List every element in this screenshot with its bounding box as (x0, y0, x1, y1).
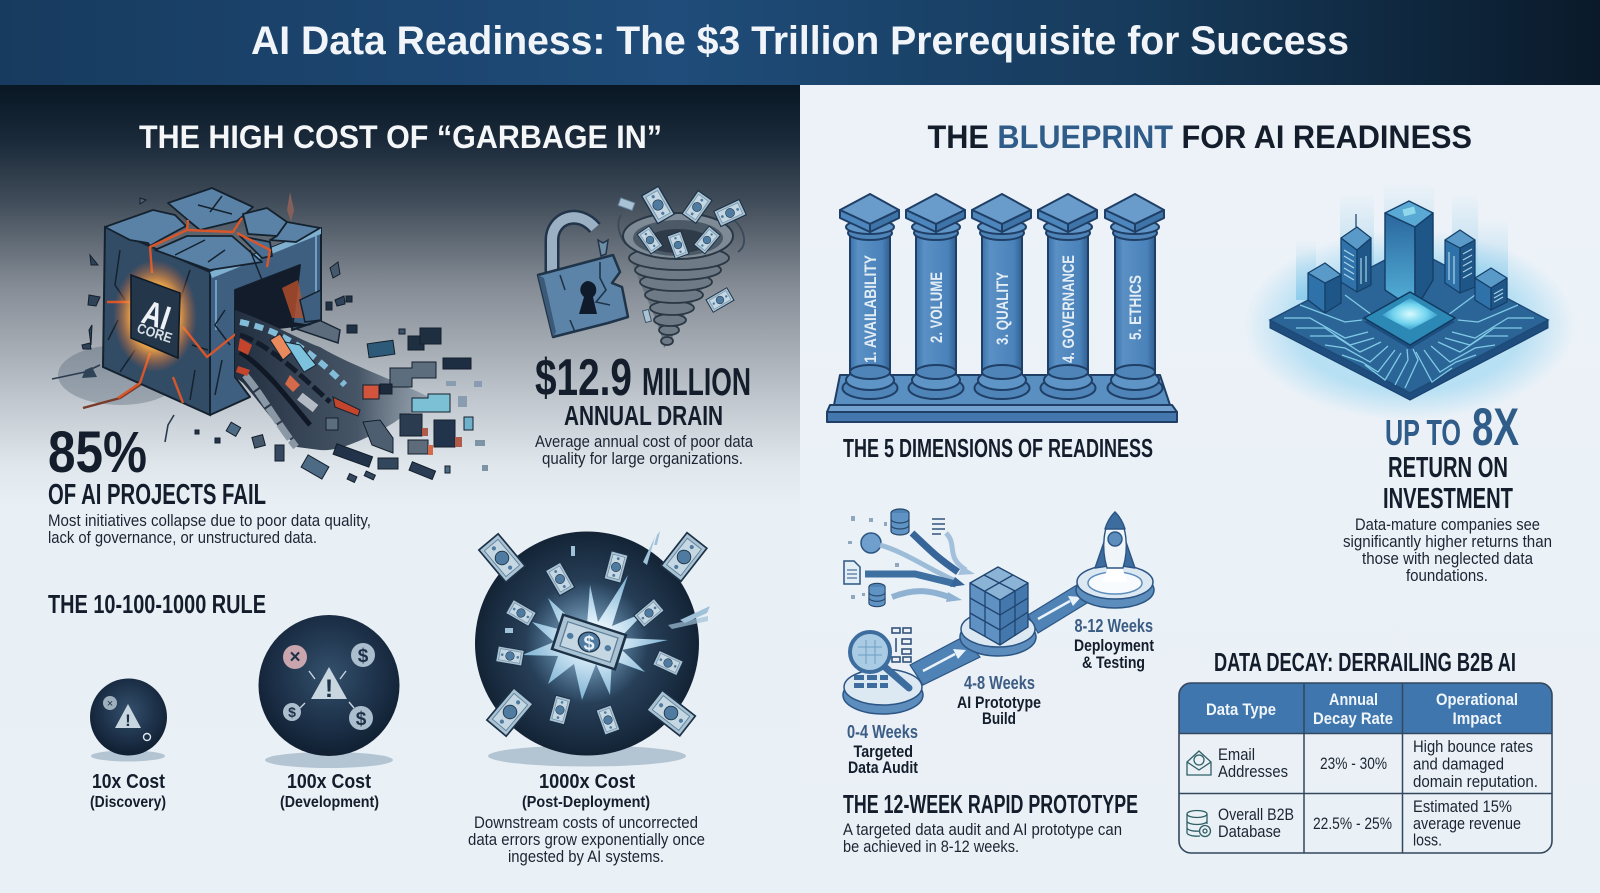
table: data decay rates: High bounce rates (1413, 738, 1533, 756)
stat: $12.9 million annual drain: MILLION (642, 361, 751, 404)
data sources (891, 509, 909, 535)
timeline label: 0-4 weeks (847, 722, 918, 777)
heading: the 5 dimensions of readiness: THE 5 DIMENSIONS OF READINESS (843, 433, 1153, 463)
table: data decay rates: domain reputation. (1413, 773, 1538, 791)
heading: 10-100-1000 rule: THE 10-100-1000 RULE (48, 589, 266, 619)
label: 10x cost: (Discovery) (90, 794, 166, 811)
glow (1244, 230, 1574, 420)
label: 1000x cost and explanation: (Post-Deployment) (522, 794, 650, 811)
stream details (240, 322, 345, 447)
heading and text: 12-week rapid prototype: be achieved in 8-12 weeks. (843, 837, 1019, 856)
road arrows (923, 654, 955, 671)
stream upper arm (270, 300, 340, 343)
table: data decay rates: 23% - 30% (1320, 755, 1387, 773)
title banner: AI Data Readiness: The $3 Trillion Prerequisite for Success (251, 19, 1349, 63)
heading and text: 12-week rapid prototype: A targeted data audit and AI prototype can (843, 820, 1122, 839)
icon: database with gear (1187, 810, 1210, 836)
cube right face with breach (210, 228, 321, 415)
sphere: 100x cost: $ (356, 709, 367, 730)
pillar 5: 5. ETHICS (1126, 275, 1145, 340)
tornado bands (629, 246, 729, 345)
timeline label: 8-12 weeks: 8-12 Weeks (1074, 616, 1153, 636)
table: data decay rates: Database (1218, 823, 1281, 841)
sphere: 10x cost (90, 678, 167, 762)
table: data decay rates: Overall B2B (1218, 806, 1294, 824)
label: 10x cost (90, 771, 166, 811)
timeline label: 4-8 weeks: Build (982, 709, 1016, 728)
stat: $12.9 million annual drain: $12.9 (535, 349, 632, 407)
ground dust and cracks (58, 345, 182, 405)
table: data decay rates: loss. (1413, 832, 1442, 850)
timeline label: 8-12 weeks: Deployment (1074, 636, 1154, 655)
timeline label: 8-12 weeks (1074, 616, 1154, 672)
plinth (827, 375, 1177, 422)
falling bills (642, 186, 674, 224)
title banner (0, 0, 1600, 85)
top stones (105, 188, 320, 270)
right small block (1475, 278, 1491, 310)
stat: 85% of AI projects fail: Most initiatives collapse due to poor data quality, (48, 511, 371, 530)
AI core chip (131, 275, 180, 358)
sphere: 100x cost: $ (288, 704, 296, 720)
stat: $12.9 million annual drain: Average annual cost of poor data (535, 432, 753, 451)
stat: $12.9 million annual drain: ANNUAL DRAIN (564, 400, 723, 431)
table: data decay rates: 22.5% - 25% (1313, 815, 1392, 833)
stat: up to 8x return on investment: RETURN ON (1388, 452, 1508, 484)
label: 100x cost: (Development) (280, 794, 379, 811)
traces (1284, 295, 1534, 388)
pillar 4: 4. GOVERNANCE (1059, 255, 1078, 363)
icon: money tornado (618, 186, 746, 348)
stat: up to 8x return on investment: foundations. (1406, 566, 1488, 585)
left tall tower (1308, 214, 1507, 313)
central chip (1364, 296, 1455, 349)
timeline label: 0-4 weeks: 0-4 Weeks (847, 722, 918, 742)
data stream swath (235, 310, 440, 450)
right tall tower (1445, 240, 1460, 293)
timeline label: 4-8 weeks (957, 673, 1041, 728)
sphere: 1000x cost explosion (475, 531, 710, 766)
pillar 2: 2. VOLUME (927, 272, 946, 343)
disc 1 (843, 676, 923, 714)
icon: shattered AI core cube with leaking data stream (52, 188, 488, 482)
timeline label: 4-8 weeks: AI Prototype (957, 693, 1041, 712)
flying data fragments (82, 192, 488, 482)
stat: up to 8x return on investment (1343, 398, 1552, 585)
left small block (1308, 273, 1325, 313)
orange and red shards (236, 334, 360, 416)
heading and text: 12-week rapid prototype (843, 789, 1138, 856)
label: 1000x cost and explanation: Downstream costs of uncorrected (474, 813, 698, 832)
breach opening (235, 265, 312, 377)
light beams (1296, 185, 1508, 305)
stat: 85% of AI projects fail: OF AI PROJECTS FAIL (48, 479, 266, 511)
table: data decay rates: Decay Rate (1313, 710, 1393, 728)
sphere: 10x cost: × (107, 698, 113, 710)
table: data decay rates: Addresses (1218, 763, 1288, 781)
inflow arrows (865, 533, 966, 598)
pillar 1 (840, 194, 899, 399)
icon: broken padlock (538, 217, 628, 337)
table: data decay rates: Estimated 15% (1413, 798, 1512, 816)
stat: up to 8x return on investment: UP TO (1385, 412, 1461, 453)
timeline label: 0-4 weeks: Targeted (854, 742, 913, 761)
magnifier (850, 628, 911, 688)
table: data decay rates: Annual (1329, 691, 1378, 709)
label: 100x cost: 100x Cost (287, 771, 371, 793)
table: data decay rates: and damaged (1413, 756, 1504, 774)
label: 10x cost: 10x Cost (92, 771, 165, 793)
stat: up to 8x return on investment: 8X (1472, 398, 1519, 457)
sphere: 100x cost: ! (325, 675, 333, 703)
heading and text: 12-week rapid prototype: THE 12-WEEK RAPID PROTOTYPE (843, 789, 1138, 819)
AI core chip: AI (138, 293, 175, 338)
icon: data city on circuit board (1244, 185, 1574, 420)
pillar 3: 3. QUALITY (993, 271, 1012, 345)
pillar 1: 1. AVAILABILITY (861, 254, 880, 363)
table: data decay rates: Email (1218, 746, 1255, 764)
timeline label: 0-4 weeks: Data Audit (848, 758, 918, 777)
stat: 85% of AI projects fail: lack of governance, or unstructured data. (48, 528, 317, 547)
molten cracks (107, 218, 270, 403)
stat: up to 8x return on investment: INVESTMENT (1383, 483, 1513, 515)
table: data decay rates: Data Type (1206, 701, 1276, 719)
sphere: 10x cost: ! (125, 711, 131, 730)
cube stack (970, 567, 1028, 645)
sphere: 100x cost: $ (358, 646, 369, 667)
circuit board (1270, 320, 1548, 400)
pillar 4 (1038, 194, 1097, 399)
heading: the high cost of garbage in: THE HIGH COST OF “GARBAGE IN” (139, 119, 662, 155)
arrow heads (946, 566, 975, 602)
shards (505, 531, 710, 633)
pillar 2 (906, 194, 965, 399)
sphere: 100x cost: × (289, 647, 301, 668)
label: 1000x cost and explanation (468, 771, 705, 866)
stat: 85% of AI projects fail: 85% (48, 420, 147, 485)
table: data decay rates: Operational (1436, 691, 1518, 709)
pillar 3 (972, 194, 1031, 399)
stat: up to 8x return on investment: Data-mature companies see (1355, 515, 1540, 534)
timeline label: 8-12 weeks: & Testing (1082, 653, 1145, 672)
stat: $12.9 million annual drain (535, 349, 753, 468)
sphere: 1000x cost explosion: $ (583, 633, 595, 655)
rocket (1095, 512, 1135, 582)
stat: $12.9 million annual drain: quality for large organizations. (542, 449, 743, 468)
label: 100x cost (280, 771, 379, 811)
table: data decay rates: Impact (1452, 710, 1502, 728)
icon: 12-week roadmap (843, 509, 1154, 714)
icon: email envelope (1187, 751, 1211, 775)
road (910, 637, 980, 685)
stone cracks (108, 196, 262, 400)
stat: 85% of AI projects fail (48, 420, 371, 547)
timeline label: 4-8 weeks: 4-8 Weeks (964, 673, 1035, 693)
chip glow (113, 260, 197, 372)
pillar 5 (1105, 194, 1164, 399)
icon: five pillars on a plinth (827, 194, 1177, 422)
label: 1000x cost and explanation: ingested by AI systems. (508, 847, 664, 866)
table: data decay rates: average revenue (1413, 815, 1521, 833)
AI core chip: CORE (135, 320, 174, 346)
table: data decay rates (1179, 683, 1552, 853)
label: 1000x cost and explanation: data errors grow exponentially once (468, 830, 705, 849)
cube left face (103, 227, 210, 415)
tall central tower (1385, 201, 1433, 310)
sphere: 100x cost (258, 615, 400, 768)
window stripes (1344, 249, 1503, 302)
heading: the blueprint for AI readiness: THE BLUEPRINT FOR AI READINESS (928, 119, 1472, 155)
disc 2 (960, 618, 1036, 656)
stat: up to 8x return on investment: significantly higher returns than (1343, 532, 1552, 551)
disc 3 (1076, 572, 1154, 608)
label: 1000x cost and explanation: 1000x Cost (539, 771, 635, 793)
table header (1179, 683, 1552, 733)
stat: up to 8x return on investment: those with neglected data (1362, 549, 1533, 568)
